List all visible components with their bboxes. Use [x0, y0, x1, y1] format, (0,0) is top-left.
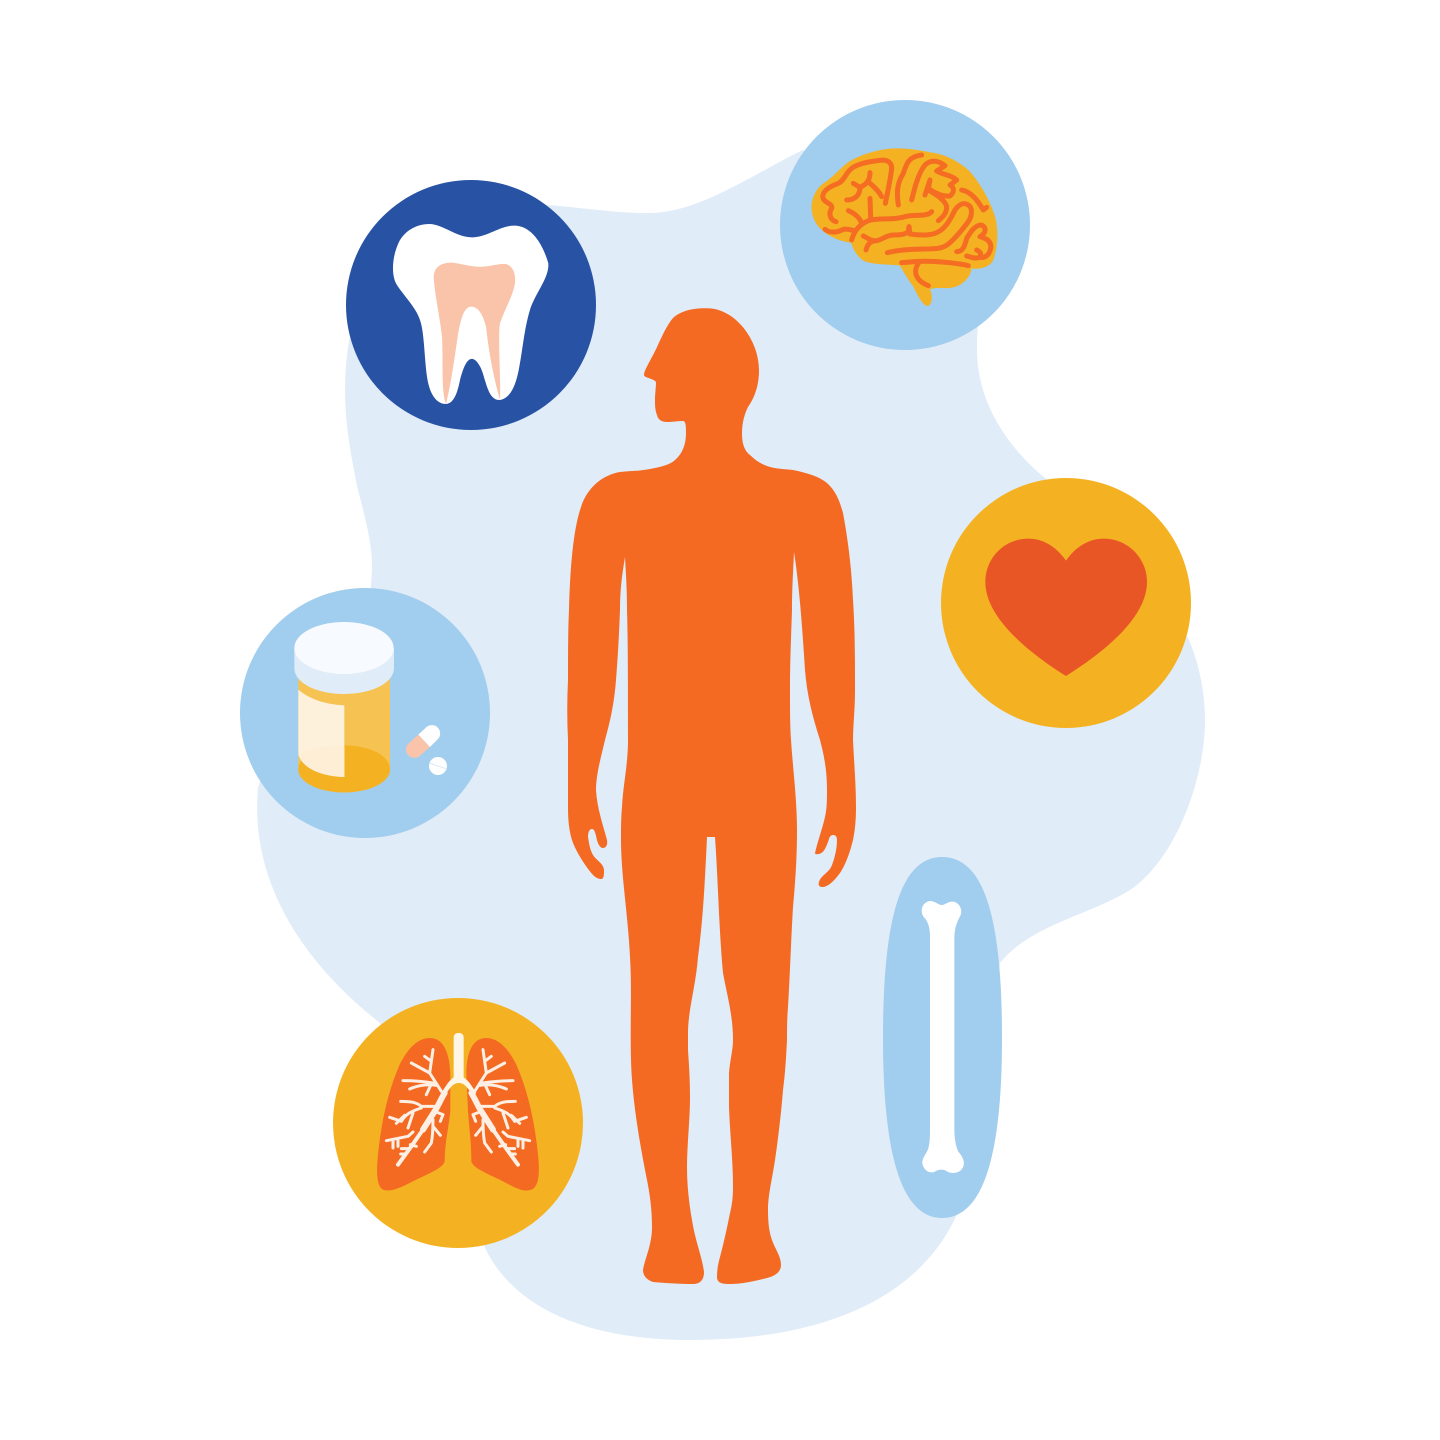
icon: heart — [941, 478, 1191, 728]
background blob — [257, 150, 1205, 1340]
icon: lungs — [333, 998, 583, 1248]
human body silhouette — [567, 308, 856, 1284]
icon: brain — [780, 100, 1030, 350]
icon: tooth — [346, 180, 596, 430]
icon: pill bottle and pills — [240, 588, 490, 838]
icon: bone — [883, 857, 1002, 1218]
